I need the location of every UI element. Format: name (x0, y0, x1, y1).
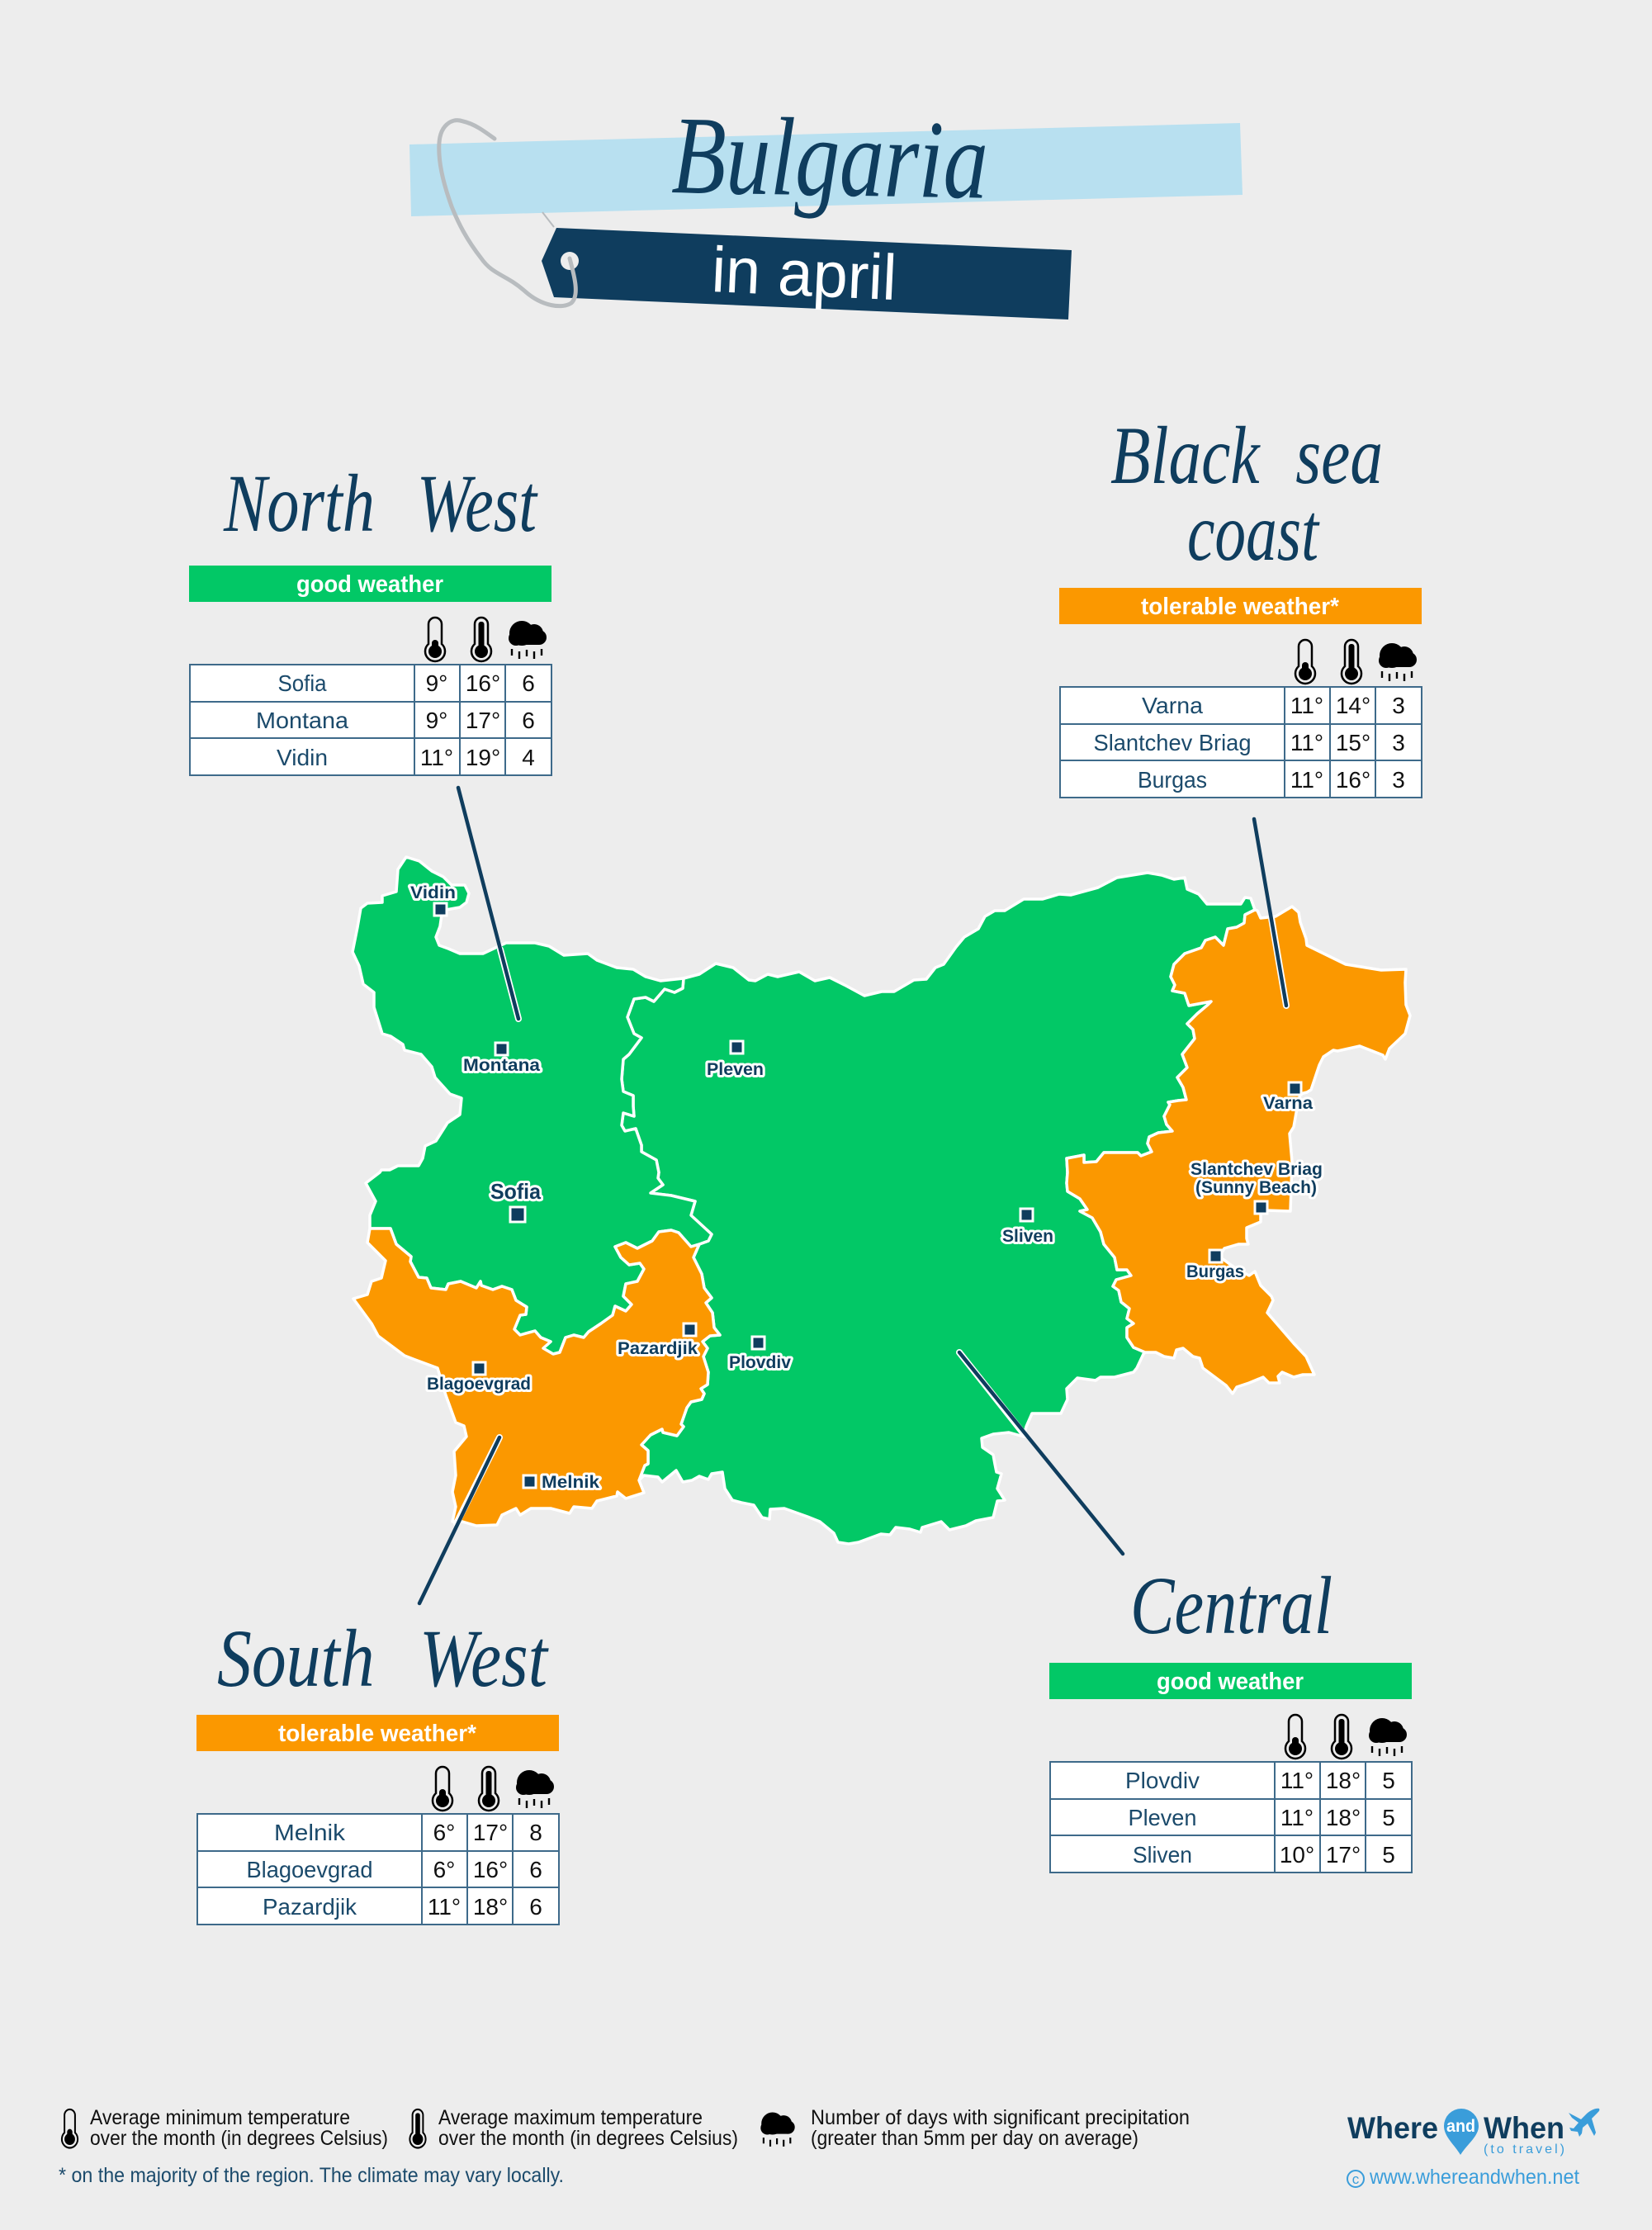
panel: South West (196, 1612, 559, 1925)
table: 16° (473, 1857, 508, 1882)
table: Montana (256, 708, 348, 733)
logo plane (1569, 2109, 1599, 2137)
weather bar: tolerable weather: tolerable weather* (278, 1721, 477, 1747)
tag string short segment (542, 212, 554, 227)
heading: North West: North West (223, 457, 538, 549)
legend icon: rain cloud (760, 2112, 795, 2147)
table: Sliven (1133, 1842, 1192, 1868)
city: Pleven (707, 1041, 764, 1079)
table: 8 (529, 1820, 542, 1845)
table: 3 (1392, 730, 1405, 755)
city: Vidin (410, 883, 456, 916)
table: Plovdiv (1125, 1768, 1200, 1793)
region: North West (353, 857, 712, 1354)
weather bar: tolerable weather: tolerable weather* (1141, 594, 1340, 620)
city: Varna (1263, 1082, 1313, 1113)
table: 15° (1336, 730, 1370, 755)
table: 9° (426, 670, 447, 696)
table: 3 (1392, 693, 1405, 718)
heading: Black sea coast: Black sea (1110, 410, 1383, 501)
city: Sliven: Sliven (1002, 1227, 1053, 1246)
city: Sliven (1002, 1209, 1053, 1246)
logo: Where and When (1347, 2109, 1599, 2189)
legend text: maximum temperature: over the month (in degrees Celsius) (438, 2127, 738, 2150)
weather bar: good weather (189, 566, 551, 602)
panel: Black sea coast (1059, 410, 1422, 798)
table: 3 (1392, 767, 1405, 793)
city: Montana (463, 1043, 540, 1075)
panel: North West (189, 457, 551, 775)
table: Blagoevgrad (246, 1857, 373, 1882)
table: 14° (1336, 693, 1370, 718)
table group (1049, 1663, 1412, 1873)
legend (59, 2106, 1190, 2187)
legend text: maximum temperature (438, 2106, 738, 2150)
table: Pazardjik (263, 1894, 357, 1920)
leader line: Central (959, 1352, 1123, 1554)
table: Vidin (277, 745, 328, 770)
legend text: maximum temperature: Average maximum temperature (438, 2106, 703, 2129)
logo tagline: (to travel) (1484, 2142, 1564, 2157)
city: Plovdiv: Plovdiv (729, 1353, 791, 1372)
table: 10° (1280, 1842, 1314, 1868)
title: luggage tag with Bulgaria in april (409, 94, 1243, 320)
table: 6° (433, 1857, 455, 1882)
region: South West (353, 1229, 720, 1526)
legend text: minimum temperature (90, 2106, 388, 2150)
table: 18° (1326, 1805, 1361, 1830)
city: Blagoevgrad (427, 1362, 531, 1394)
heading: South West: South West (217, 1612, 549, 1704)
icons row (1295, 640, 1417, 684)
icons row (1285, 1715, 1407, 1759)
table: 11° (1290, 767, 1323, 793)
table: 6 (529, 1857, 542, 1882)
city: Slantchev Briag (Sunny Beach): (Sunny Beach) (1195, 1178, 1317, 1197)
copyright mark (1347, 2171, 1364, 2187)
table (1050, 1762, 1412, 1873)
legend text: minimum temperature: over the month (in degrees Celsius) (90, 2127, 388, 2150)
table: Sofia (277, 670, 327, 696)
tag body (542, 228, 1072, 320)
table: 11° (1280, 1768, 1314, 1793)
weather bar: good weather (1049, 1663, 1412, 1699)
region: Black sea coast (1067, 907, 1410, 1394)
website: www.whereandwhen.net (1369, 2166, 1579, 2189)
map of Bulgaria (353, 857, 1410, 1544)
table (197, 1814, 559, 1925)
heading: Black sea coast (1110, 410, 1383, 578)
table group (1059, 588, 1422, 798)
copyright mark: c (1352, 2171, 1360, 2187)
table: 17° (1326, 1842, 1361, 1868)
table: 16° (466, 670, 500, 696)
legend icon: minimum temperature (62, 2109, 78, 2148)
table: 17° (466, 708, 500, 733)
table: 5 (1382, 1805, 1395, 1830)
city: Slantchev Briag (Sunny Beach): Slantchev Briag (1190, 1160, 1323, 1179)
city: Melnik: Melnik (542, 1473, 599, 1492)
logo and: and (1446, 2117, 1475, 2136)
icons row (425, 618, 547, 661)
table: 5 (1382, 1842, 1395, 1868)
footnote: * on the majority of the region. The climate may vary locally. (59, 2164, 564, 2187)
city: Vidin: Vidin (410, 883, 456, 902)
city: Sofia (490, 1179, 542, 1222)
leader line: South West (419, 1437, 499, 1603)
table: 5 (1382, 1768, 1395, 1793)
legend text: minimum temperature: Average minimum temperature (90, 2106, 350, 2129)
table: 11° (1280, 1805, 1314, 1830)
heading: Black sea coast: coast (1187, 486, 1320, 578)
weather bar: good weather: good weather (1157, 1669, 1304, 1695)
title tape: light blue band (409, 123, 1243, 216)
city: Slantchev Briag (Sunny Beach) (1190, 1160, 1323, 1214)
weather bar: good weather: good weather (296, 571, 443, 598)
weather bar: tolerable weather (1059, 588, 1422, 624)
city markers and labels (410, 883, 1323, 1492)
city: Pazardjik: Pazardjik (618, 1339, 698, 1358)
table (190, 665, 551, 775)
table: 6 (522, 670, 535, 696)
city: Sofia: Sofia (490, 1179, 542, 1204)
city: Montana: Montana (463, 1056, 540, 1075)
tag string (439, 121, 575, 306)
city: Burgas (1186, 1250, 1244, 1281)
leader line: North West (458, 788, 518, 1019)
city: Pazardjik (618, 1323, 698, 1358)
city: Plovdiv (729, 1337, 791, 1372)
table: 18° (473, 1894, 508, 1920)
table: 16° (1336, 767, 1370, 793)
legend icon: maximum temperature (409, 2109, 426, 2148)
city: Pleven: Pleven (707, 1060, 764, 1079)
table: 11° (428, 1894, 461, 1920)
panel: Central (1049, 1560, 1412, 1873)
table: 6° (433, 1820, 455, 1845)
table: 11° (420, 745, 453, 770)
table: Varna (1142, 693, 1203, 718)
table: 11° (1290, 730, 1323, 755)
legend text: precipitation (811, 2106, 1190, 2150)
leader line: Black sea coast (1254, 819, 1286, 1006)
table (1060, 687, 1422, 798)
table: Slantchev Briag (1093, 730, 1252, 755)
region: Central (622, 873, 1255, 1544)
legend text: precipitation: Number of days with significant precipitation (811, 2106, 1190, 2129)
subheading: in april: in april (710, 233, 898, 314)
table: Pleven (1128, 1805, 1197, 1830)
logo wordmark: Where (1347, 2111, 1438, 2145)
table: 4 (522, 745, 535, 770)
city: Varna: Varna (1263, 1094, 1313, 1113)
legend text: precipitation: (greater than 5mm per day on average) (811, 2127, 1138, 2150)
city: Burgas: Burgas (1186, 1262, 1244, 1281)
table: 6 (522, 708, 535, 733)
tag hole (561, 252, 579, 270)
table: Burgas (1138, 767, 1207, 793)
city: Blagoevgrad: Blagoevgrad (427, 1375, 531, 1394)
table: 9° (426, 708, 447, 733)
heading: Bulgaria: Bulgaria (670, 94, 989, 223)
table: 18° (1326, 1768, 1361, 1793)
logo wordmark: When (1484, 2111, 1564, 2145)
table: 17° (473, 1820, 508, 1845)
weather bar: tolerable weather (196, 1715, 559, 1751)
table group (196, 1715, 559, 1925)
heading: Central: Central (1130, 1560, 1332, 1651)
table: 19° (466, 745, 500, 770)
logo wordmark (1347, 2111, 1564, 2145)
table: 11° (1290, 693, 1323, 718)
logo pin (1444, 2109, 1479, 2155)
table: Melnik (274, 1820, 346, 1845)
table: 6 (529, 1894, 542, 1920)
icons row (433, 1767, 554, 1811)
